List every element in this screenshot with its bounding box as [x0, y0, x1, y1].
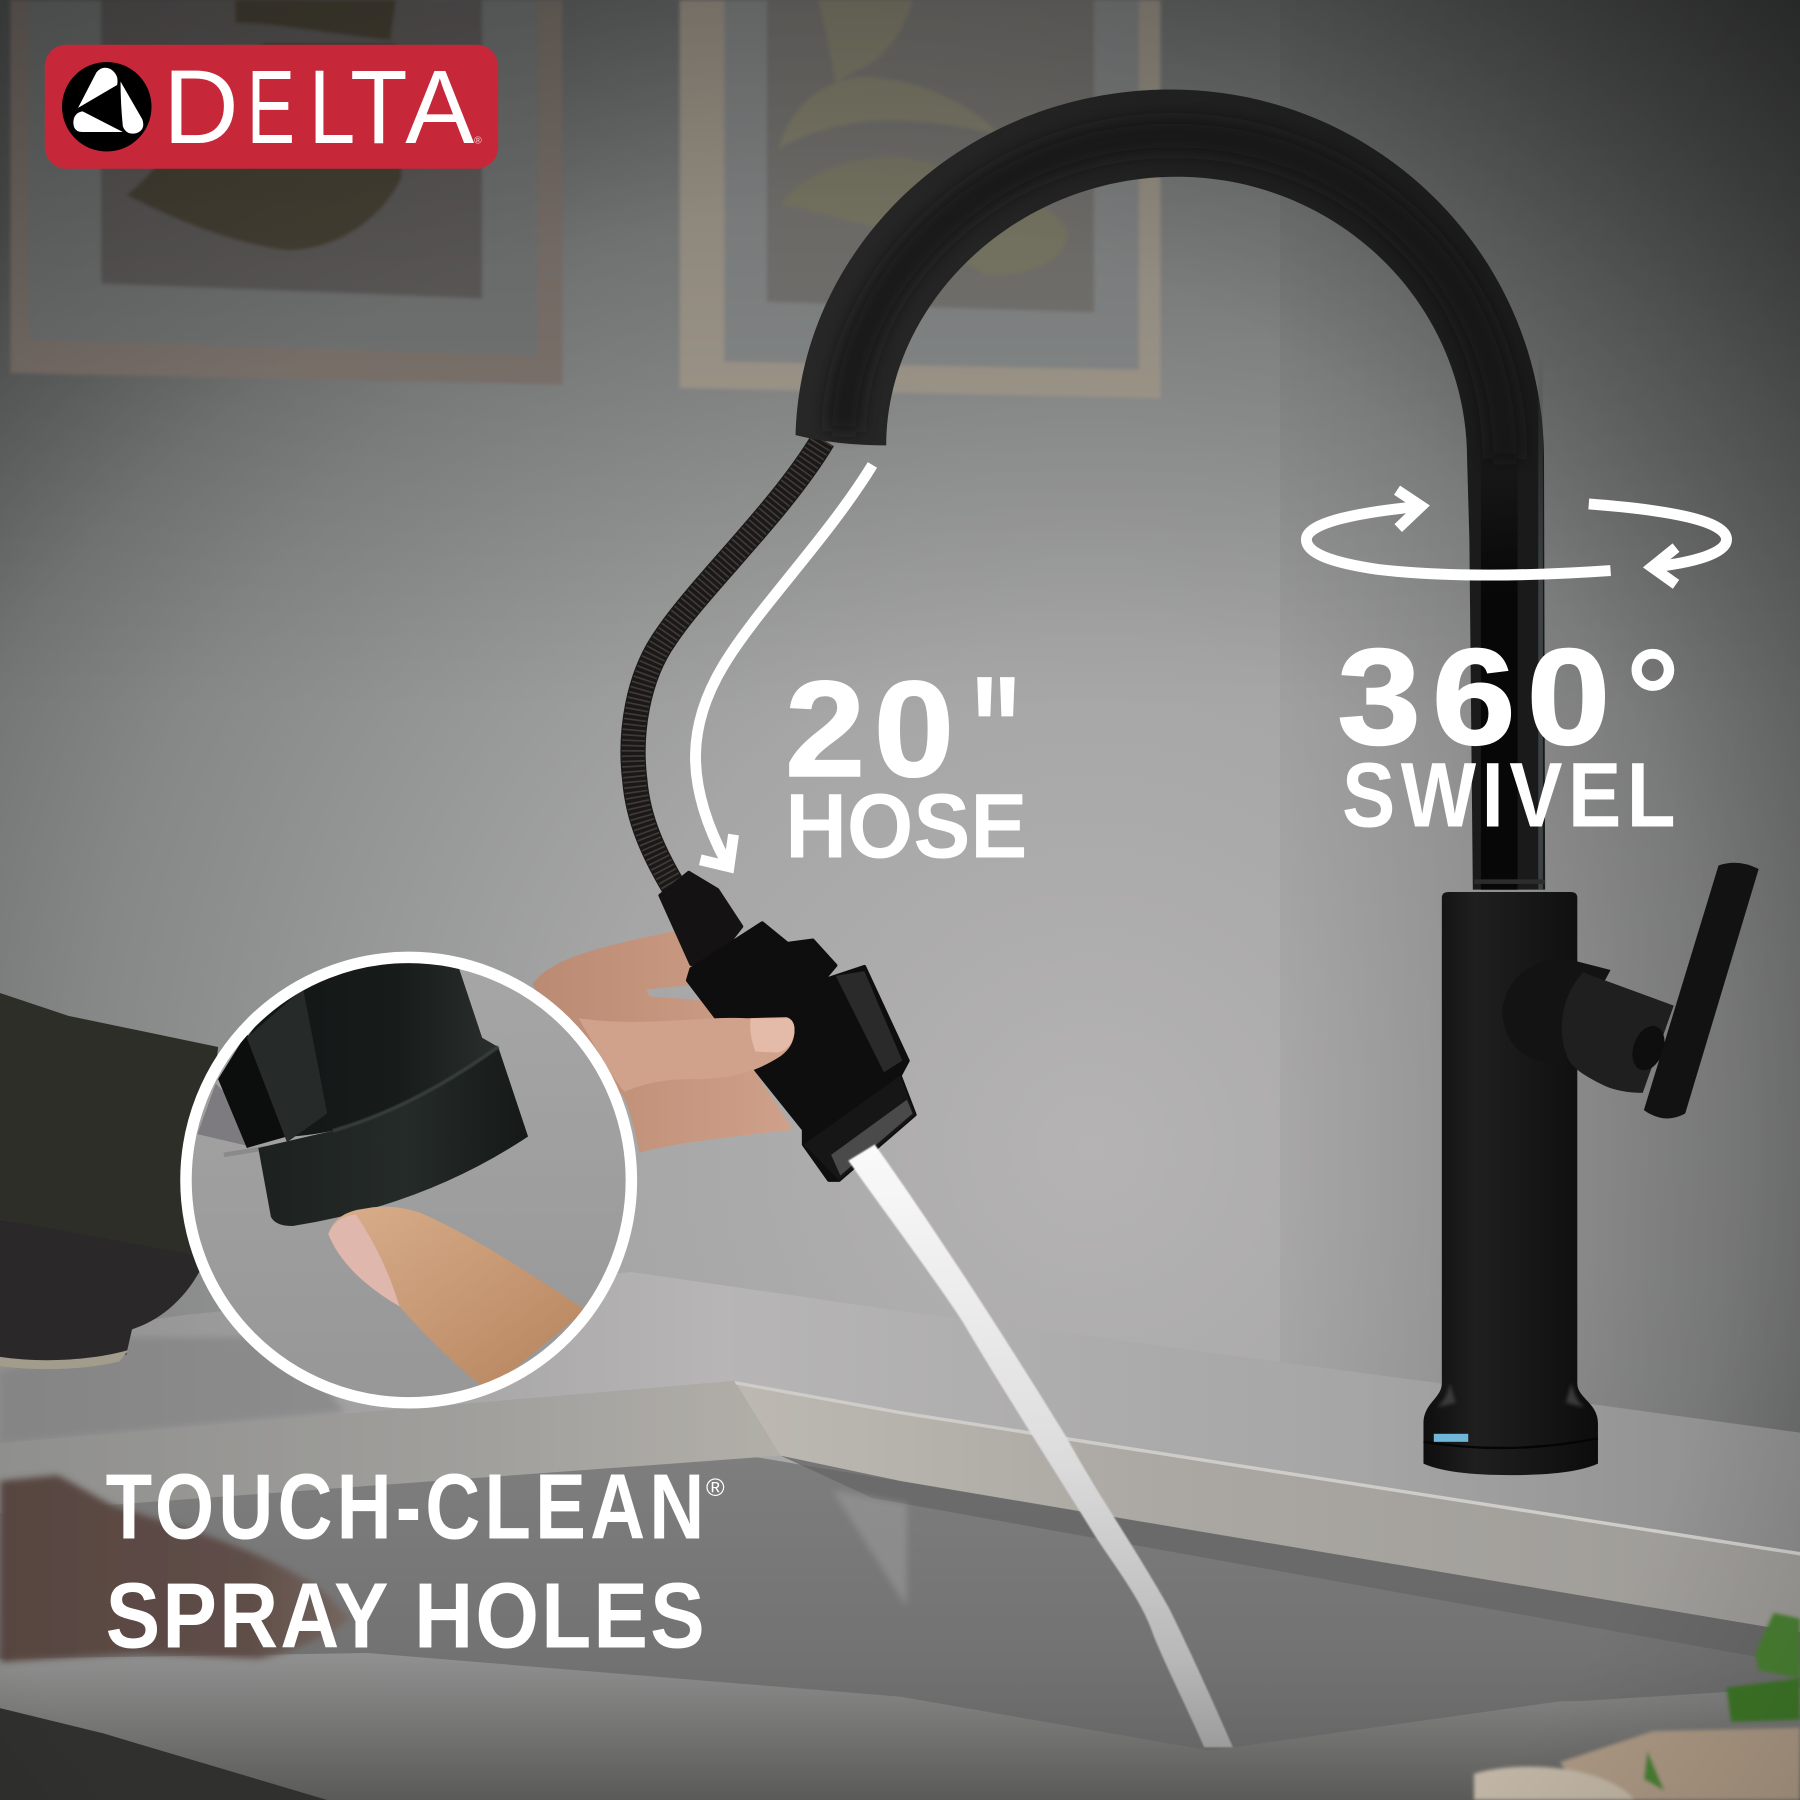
fingertip nail [328, 1215, 399, 1306]
upper spray body [247, 959, 498, 1136]
20 inch figure: 20 [785, 653, 954, 805]
countertop front edge right [735, 1381, 1800, 1632]
bowl shadow [0, 1337, 344, 1443]
food on cutting board [1474, 1613, 1800, 1800]
touch-clean callout [106, 1455, 725, 1667]
bowl [0, 1219, 207, 1366]
trigger pin [224, 1148, 266, 1155]
touching fingertip [328, 1207, 585, 1391]
line one: TOUCH-CLEAN [106, 1455, 704, 1559]
360 figure: 360 [1337, 621, 1610, 773]
hose label: HOSE [785, 776, 1027, 878]
red badge [45, 45, 498, 169]
base seam [1423, 1438, 1598, 1448]
wordmark: D [163, 49, 239, 166]
band highlight [333, 1047, 498, 1131]
bowl foot [0, 1350, 129, 1369]
neck edge highlight [1538, 344, 1543, 890]
inset ring [186, 957, 631, 1403]
swivel rotation arrows [1306, 490, 1727, 584]
upper wall shade [0, 0, 1800, 712]
pull-down spray head [660, 872, 915, 1180]
hand back fingers [533, 931, 793, 1153]
swivel label: SWIVEL [1342, 744, 1676, 847]
registered mark: ® [706, 1474, 725, 1502]
wordmark: L [309, 49, 355, 166]
line two: SPRAY HOLES [106, 1563, 705, 1667]
front counter [0, 1653, 1800, 1800]
pull-down hose [633, 440, 823, 893]
handle lever [1644, 863, 1759, 1119]
lower spray band [258, 1047, 528, 1226]
inset detail: touch-clean spray holes [186, 957, 631, 1403]
hand index finger [579, 1017, 795, 1092]
wordmark: A [405, 49, 474, 166]
black trigger strip [218, 1033, 287, 1148]
blue indicator light [1434, 1434, 1468, 1442]
fingernail [750, 1018, 795, 1053]
wordmark [163, 49, 474, 166]
neck collar [1474, 879, 1545, 884]
sink far wall shadow [781, 1456, 1800, 1665]
handle barrel [1562, 972, 1674, 1093]
sink interior [0, 1454, 1800, 1800]
faucet body [1423, 892, 1598, 1475]
inch marks: " [970, 642, 1022, 819]
base gloss [1437, 1383, 1584, 1407]
wordmark: E [247, 49, 295, 166]
countertop surface [0, 1272, 1800, 1552]
handle stem [1627, 1021, 1670, 1075]
water stream [848, 1145, 1233, 1747]
handle hub [1503, 958, 1611, 1065]
metal trigger piece [198, 1084, 246, 1146]
neck shading [1481, 436, 1518, 890]
spout core shading [844, 135, 1505, 459]
swivel callout [1337, 620, 1680, 847]
countertop front edge left [0, 1381, 781, 1513]
sink right wall highlight [832, 1490, 907, 1607]
delta emblem [62, 62, 152, 152]
hand resting on counter [0, 1475, 350, 1662]
left framed art [10, 0, 563, 385]
inset spray face and finger [197, 959, 585, 1391]
right wall panel [1280, 0, 1800, 1492]
hose length arrow [696, 465, 872, 867]
faucet [633, 90, 1759, 1747]
sweater sleeve [0, 993, 218, 1257]
arched spout [796, 90, 1545, 890]
hose callout [785, 642, 1027, 878]
left shoulder panel [247, 988, 327, 1142]
cabinet below front counter [0, 1708, 327, 1800]
brand logo badge [45, 45, 498, 169]
center framed art [680, 0, 1161, 398]
degree mark: ° [1626, 620, 1680, 773]
wordmark: T [350, 49, 408, 166]
registered mark: ® [474, 135, 482, 146]
